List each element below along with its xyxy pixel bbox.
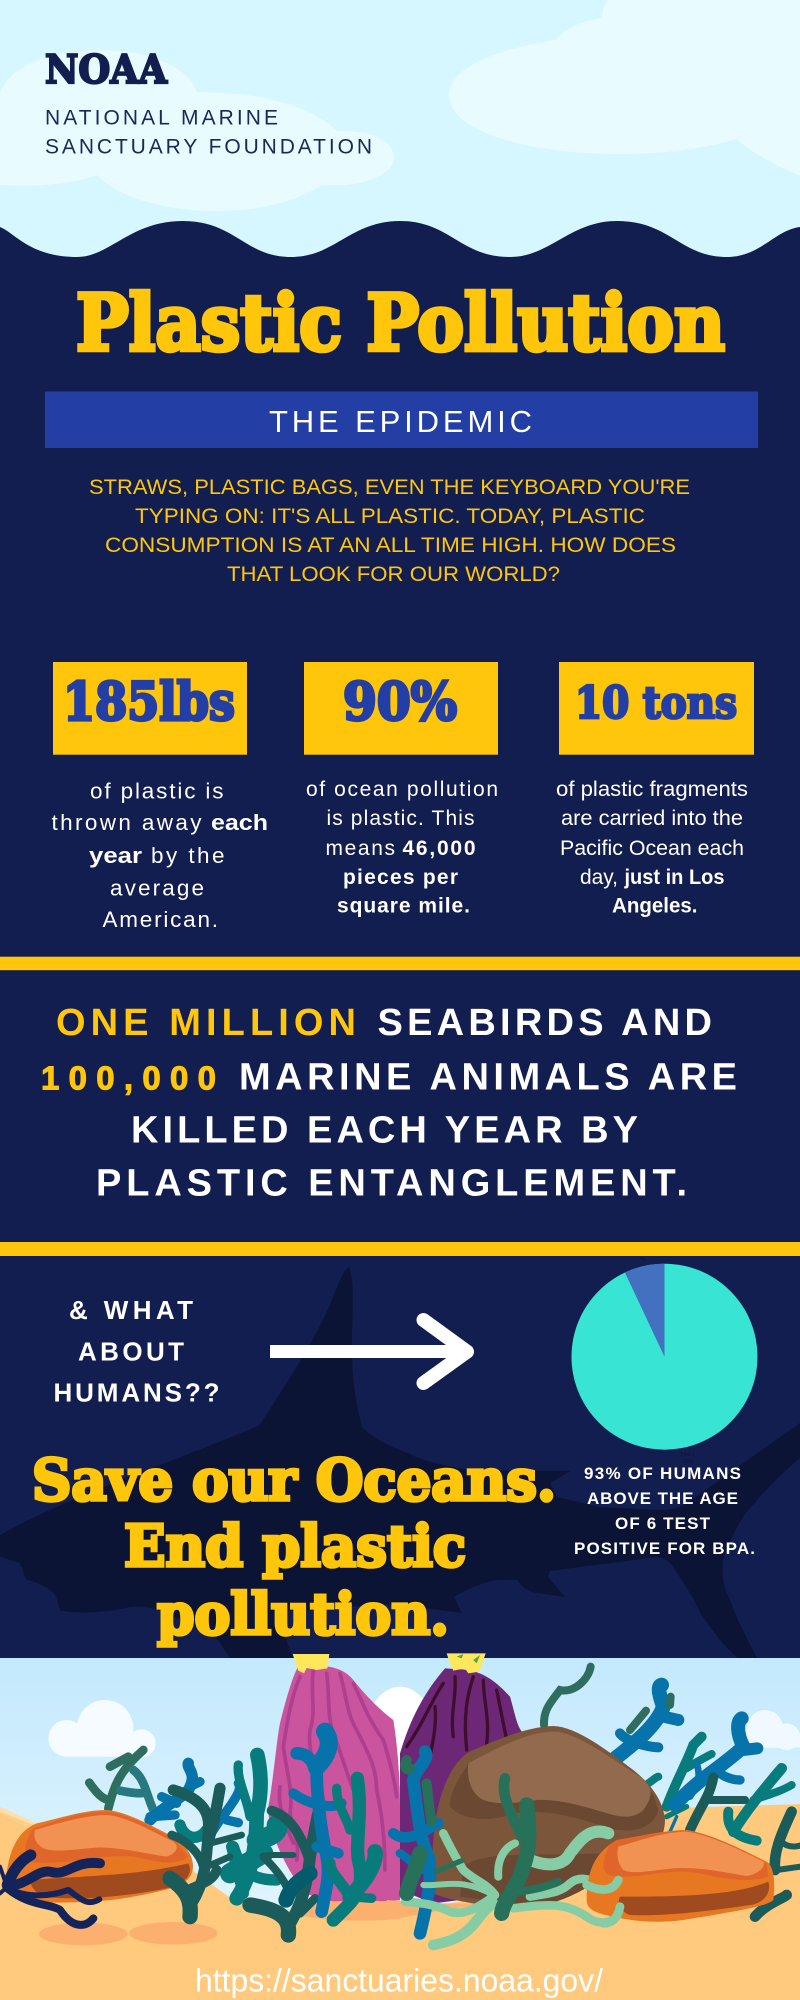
cloud: left xyxy=(0,50,394,211)
headline: seabirds and marine animals: ONE MILLION xyxy=(56,1002,356,1044)
pie caption xyxy=(574,1464,755,1558)
stat text: thrown away xyxy=(52,810,202,835)
pie chart: 7% xyxy=(638,1257,646,1263)
banner: the epidemic: THE EPIDEMIC xyxy=(269,404,532,439)
call to action: pollution. xyxy=(157,1581,449,1648)
stat: 10 tons: 10 tons xyxy=(575,678,737,729)
stat text: each xyxy=(211,810,268,835)
stat text: square mile. xyxy=(337,895,470,918)
sand horizon xyxy=(400,1804,800,2000)
navy wave background xyxy=(0,221,800,1660)
headline: seabirds and marine animals: KILLED EACH YEAR BY xyxy=(131,1109,638,1151)
stat text: of ocean pollution xyxy=(306,778,498,801)
stat text: day, xyxy=(580,866,618,889)
blue plant over brown rock xyxy=(393,1752,438,1933)
stat text: pieces per xyxy=(343,866,458,889)
pie chart: Item 1 xyxy=(681,1452,695,1458)
teal plant xyxy=(180,1755,277,1898)
front sand xyxy=(0,1813,400,2000)
intro paragraph: STRAWS, PLASTIC BAGS, EVEN THE KEYBOARD YOU'RE xyxy=(89,476,690,499)
stat text: just in Los xyxy=(624,866,724,889)
blue plant two xyxy=(670,1718,757,1832)
mint tips over rock xyxy=(587,1880,620,1923)
stat: 10 tons xyxy=(556,662,754,918)
website url: https://sanctuaries.noaa.gov/ xyxy=(195,1963,603,1999)
teal fronds xyxy=(648,1737,792,1841)
headline: seabirds and marine animals xyxy=(41,1002,737,1204)
stat: 90%: 90% xyxy=(343,672,457,733)
pink rock xyxy=(268,1654,400,1903)
text: what about humans: ABOUT xyxy=(78,1337,184,1367)
pie caption: OF 6 TEST xyxy=(615,1514,711,1533)
dark teal plant A xyxy=(170,1788,242,1917)
back blue plant xyxy=(150,1763,239,1840)
call to action: End plastic xyxy=(124,1513,466,1580)
pie caption: POSITIVE FOR BPA. xyxy=(574,1539,755,1558)
title: Plastic Pollution xyxy=(76,278,725,369)
teal plant front xyxy=(330,1778,375,1920)
intro paragraph: TYPING ON: IT'S ALL PLASTIC. TODAY, PLASTIC xyxy=(135,505,645,528)
scene: right half xyxy=(387,1653,800,2000)
stat text: Pacific Ocean each xyxy=(560,837,744,860)
stat text: Angeles. xyxy=(612,895,698,918)
pie caption: ABOVE THE AGE xyxy=(587,1489,738,1508)
back sand xyxy=(0,1807,310,1920)
stat text: by the xyxy=(151,843,224,868)
logo: NOAA: SANCTUARY FOUNDATION xyxy=(45,135,372,158)
orange rock xyxy=(6,1810,193,1903)
stat text: of plastic fragments xyxy=(556,778,748,801)
stat text xyxy=(52,778,268,932)
intro paragraph: CONSUMPTION IS AT AN ALL TIME HIGH. HOW DOES xyxy=(105,534,676,557)
ocean floor illustration xyxy=(0,1653,800,2000)
mint sea plant xyxy=(405,1832,620,1945)
green sprout xyxy=(544,1667,591,1725)
headline: seabirds and marine animals: SEABIRDS AND xyxy=(378,1002,712,1044)
dark teal plant B xyxy=(250,1808,319,1935)
shadows xyxy=(39,1901,427,1945)
back right plants xyxy=(544,1667,800,1917)
stat text: average xyxy=(110,876,204,900)
stat text: are carried into the xyxy=(561,807,743,830)
clouds xyxy=(48,1700,156,1757)
stat: 185lbs: 185lbs xyxy=(63,672,235,733)
yellow divider xyxy=(0,1242,800,1256)
text: what about humans: & WHAT xyxy=(69,1295,193,1325)
stat text: 46,000 xyxy=(402,837,476,860)
stat text: American. xyxy=(102,907,218,932)
call to action xyxy=(32,1447,556,1648)
cloud: right xyxy=(449,0,800,176)
pie chart xyxy=(572,1257,758,1465)
stat text xyxy=(556,778,748,918)
green sea plant xyxy=(405,1760,558,1913)
headline: seabirds and marine animals: MARINE ANIMALS ARE xyxy=(239,1056,737,1098)
stat: 185lbs xyxy=(52,662,268,932)
sky background xyxy=(0,0,800,300)
stat text xyxy=(306,778,498,918)
brown rock xyxy=(432,1726,665,1907)
purple rock xyxy=(400,1653,523,1903)
pie caption: 93% OF HUMANS xyxy=(584,1464,741,1483)
cloud xyxy=(734,1710,800,1750)
logo: NOAA: NATIONAL MARINE xyxy=(45,107,278,130)
headline: seabirds and marine animals: 100,000 xyxy=(41,1059,216,1096)
stat text: means xyxy=(326,837,395,860)
stat text: is plastic. This xyxy=(326,807,474,830)
text: what about humans: HUMANS?? xyxy=(54,1378,220,1408)
stat text: year xyxy=(89,843,142,868)
dark teal plants xyxy=(690,1777,800,1917)
blue plant on pink rock xyxy=(293,1732,342,1912)
call to action: Save our Oceans. xyxy=(32,1447,556,1514)
scene: left half xyxy=(0,1654,435,2000)
shark silhouette xyxy=(0,1267,800,1658)
stat text: of plastic is xyxy=(90,778,224,803)
intro paragraph xyxy=(89,476,690,586)
banner: the epidemic xyxy=(45,392,758,448)
pie chart: 93% xyxy=(683,1459,694,1465)
logo: NOAA xyxy=(45,47,372,158)
arrow xyxy=(270,1320,467,1383)
intro paragraph: THAT LOOK FOR OUR WORLD? xyxy=(227,563,560,586)
yellow divider xyxy=(0,957,800,970)
tentacles xyxy=(0,1855,100,1925)
logo: NOAA: NOAA xyxy=(45,47,168,93)
headline: seabirds and marine animals: PLASTIC ENTANGLEMENT. xyxy=(96,1162,687,1204)
text: what about humans xyxy=(54,1295,220,1408)
white cloud xyxy=(365,1687,435,1787)
back green plant xyxy=(89,1750,157,1817)
blue plant one xyxy=(613,1685,678,1760)
orange rock right xyxy=(587,1830,774,1922)
stat: 90% xyxy=(304,662,498,918)
